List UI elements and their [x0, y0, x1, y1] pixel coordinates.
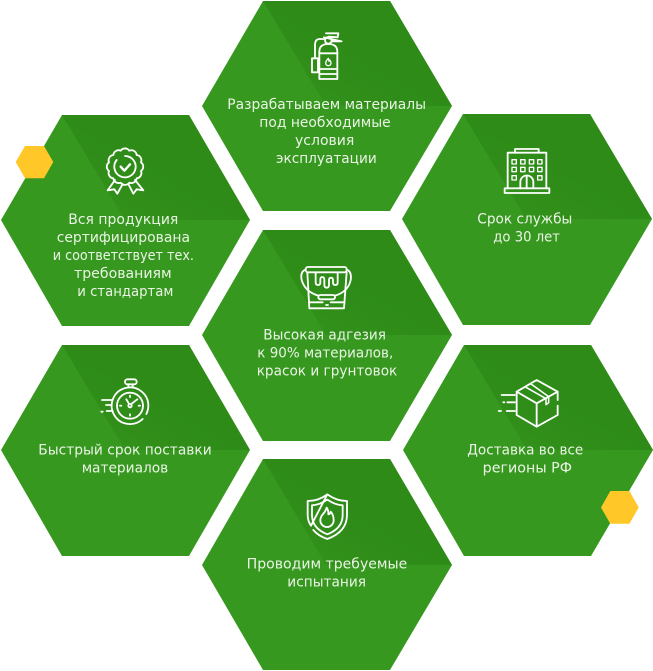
panel: delivery [403, 345, 653, 556]
panel: service life [402, 114, 652, 325]
text: materials: эксплуатации [276, 151, 377, 167]
text: service life [477, 212, 572, 246]
text: service life: до 30 лет [493, 230, 560, 246]
text: fast delivery time: Быстрый срок поставки [38, 442, 212, 458]
text: certification: требованиям [74, 266, 172, 282]
text: fast delivery time [38, 442, 212, 476]
text: adhesion: Высокая адгезия [263, 328, 386, 344]
hexagon background [202, 459, 452, 670]
text: certification: и соответствует тех. [53, 248, 194, 264]
text: delivery: регионы РФ [483, 461, 572, 477]
icon: stopwatch [101, 379, 148, 424]
text: certification: Вся продукция [68, 212, 178, 228]
icon: fire shield [308, 494, 347, 539]
text: delivery: Доставка во все [467, 443, 583, 459]
text: testing: Проводим требуемые [247, 557, 407, 573]
panel: testing [202, 459, 452, 670]
panel: certification [1, 115, 250, 326]
hexagon background [402, 114, 652, 325]
hexagon background [403, 345, 653, 556]
text: certification: сертифицирована [57, 230, 190, 246]
text: certification [53, 212, 194, 300]
panel: fast delivery time [1, 345, 250, 556]
text: testing [247, 557, 407, 590]
text: adhesion [257, 328, 397, 380]
panel: materials [202, 1, 452, 211]
text: materials: Разрабатываем материалы [227, 97, 426, 113]
text: delivery [467, 443, 583, 477]
text: testing: испытания [287, 574, 366, 590]
text: fast delivery time: материалов [82, 460, 168, 476]
icon: certified rosette [107, 148, 143, 194]
icon: fire extinguisher [312, 33, 342, 79]
text: materials [227, 97, 426, 167]
decorative accent: yellow hexagon left [16, 146, 53, 178]
text: materials: под необходимые [259, 115, 391, 131]
text: adhesion: красок и грунтовок [257, 364, 397, 380]
hexagon background [1, 345, 250, 556]
hexagon background [202, 1, 452, 211]
hexagon background [1, 115, 250, 326]
text: certification: и стандартам [77, 284, 173, 300]
text: adhesion: к 90% материалов, [257, 346, 393, 362]
text: materials: условия [295, 133, 354, 149]
panel: adhesion [202, 230, 452, 441]
icon: moving parcel [499, 380, 558, 427]
hexagon background [202, 230, 452, 441]
decorative accent: yellow hexagon right [601, 491, 639, 524]
text: service life: Срок службы [477, 212, 572, 228]
icon: building [505, 149, 549, 193]
icon: paint bucket [301, 267, 351, 308]
